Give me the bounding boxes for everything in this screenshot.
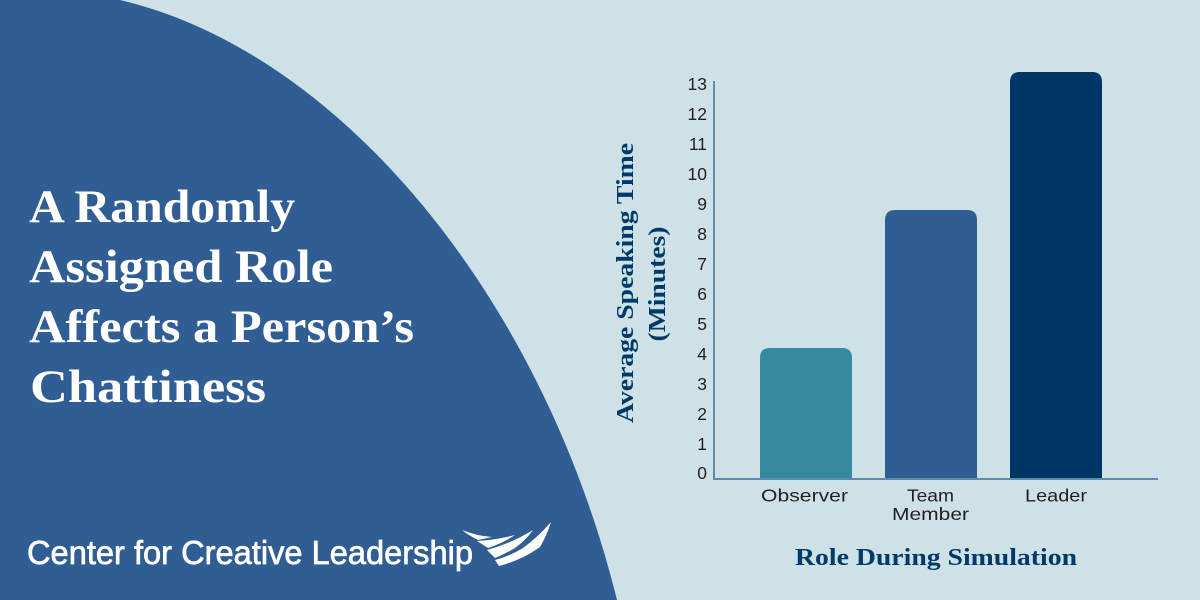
y-axis numbers: 12 — [688, 104, 707, 124]
icon: logo wing — [462, 522, 551, 566]
axes — [714, 81, 1158, 479]
bar: Team Member — [885, 210, 977, 478]
y-axis numbers: 11 — [689, 134, 707, 154]
logo wordmark: Center for Creative Leadership — [27, 534, 473, 571]
y-axis numbers — [688, 74, 707, 483]
y-axis numbers: 3 — [697, 374, 707, 394]
y-axis numbers: 2 — [697, 404, 707, 424]
y-axis title: Average Speaking Time — [613, 143, 639, 423]
y-axis numbers: 7 — [697, 254, 707, 274]
category labels: Leader — [1025, 486, 1087, 506]
y-axis numbers: 0 — [697, 463, 707, 483]
category labels: Team — [907, 486, 954, 506]
y-axis numbers: 8 — [697, 224, 707, 244]
title: Affects a Person’s — [29, 301, 414, 353]
bar: Observer — [760, 348, 852, 478]
title — [29, 181, 414, 413]
category labels: Observer — [761, 486, 848, 506]
category labels: Member — [892, 504, 969, 524]
y-axis numbers: 13 — [688, 74, 707, 94]
y-axis numbers: 10 — [688, 164, 707, 184]
title: A Randomly — [29, 181, 296, 233]
y-axis title — [613, 143, 671, 423]
y-axis numbers: 6 — [697, 284, 707, 304]
category labels — [761, 486, 1087, 524]
y-axis numbers: 4 — [697, 344, 707, 364]
y-axis numbers: 5 — [697, 314, 707, 334]
x-axis title: Role During Simulation — [795, 545, 1077, 571]
logo: Center for Creative Leadership — [27, 522, 551, 571]
panel: blue curved background — [0, 0, 617, 600]
bar: Leader — [1010, 72, 1102, 478]
title: Assigned Role — [29, 241, 333, 293]
chart: average speaking time by role — [613, 72, 1158, 571]
title: Chattiness — [30, 361, 266, 413]
y-axis numbers: 1 — [697, 434, 707, 454]
y-axis numbers: 9 — [697, 194, 707, 214]
y-axis title: (Minutes) — [645, 226, 671, 342]
